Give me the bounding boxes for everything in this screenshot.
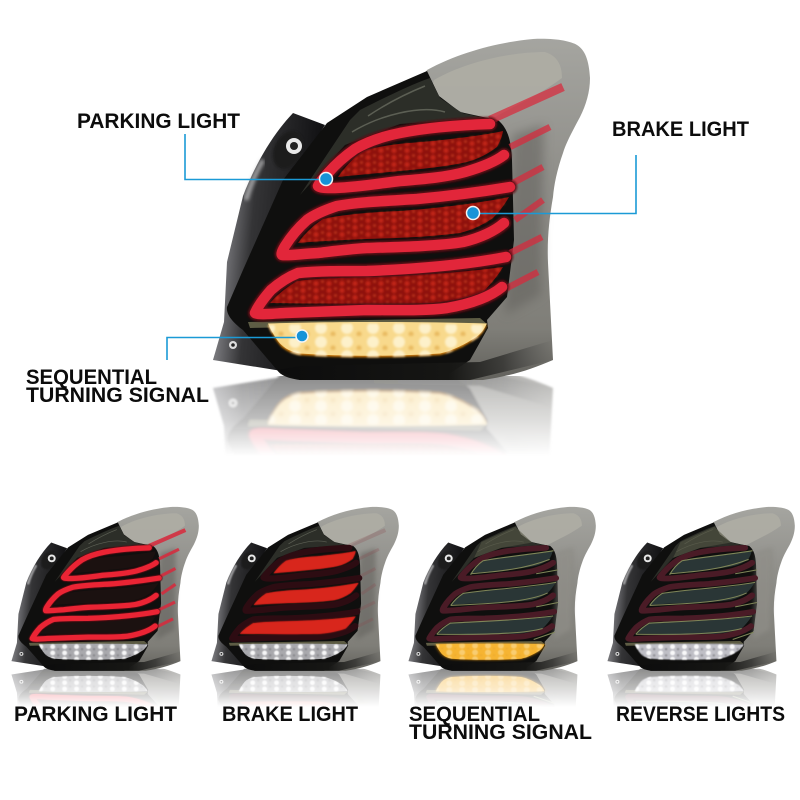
panel: reverse lights mode (608, 506, 795, 721)
callout: brake light: BRAKE LIGHT (612, 118, 749, 141)
panel: reverse lights mode: REVERSE LIGHTS (616, 703, 785, 726)
callout: parking light (77, 110, 332, 186)
callout: sequential turning signal: SEQUENTIAL (26, 366, 157, 389)
panel: sequential turning signal mode (408, 507, 596, 800)
panel: sequential turning signal mode: SEQUENTIAL (409, 703, 540, 726)
callout: parking light: PARKING LIGHT (77, 110, 240, 133)
callout: sequential turning signal: TURNING SIGNAL (26, 384, 209, 407)
panel: brake light mode (211, 507, 399, 800)
callout: sequential turning signal (26, 330, 308, 407)
panel: sequential turning signal mode: TURNING SIGNAL (409, 721, 592, 744)
panel: brake light mode: BRAKE LIGHT (222, 703, 358, 726)
callout: brake light (466, 118, 749, 220)
main tail light photo (213, 39, 590, 709)
panel: parking light mode (11, 507, 199, 800)
panel: parking light mode: PARKING LIGHT (14, 703, 177, 726)
